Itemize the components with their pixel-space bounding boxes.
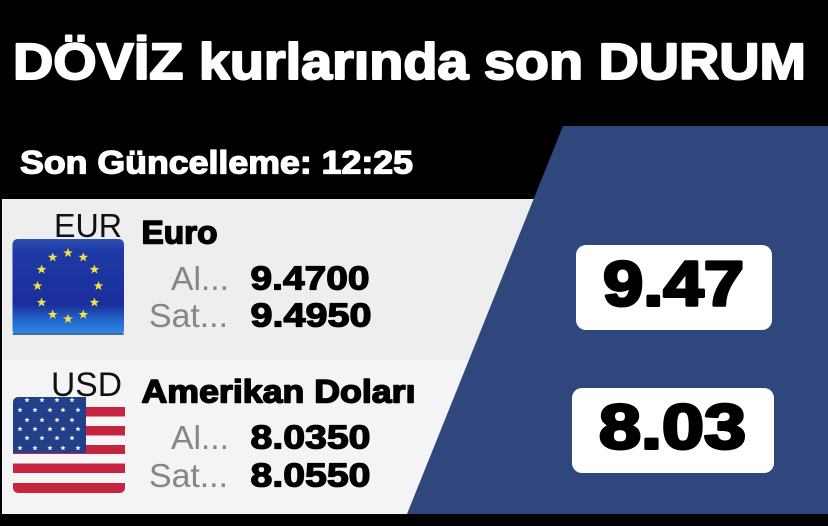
row: Euro xyxy=(12,208,372,335)
icon: US flag xyxy=(13,397,125,493)
buy value: 8.0350 xyxy=(250,418,370,456)
row: US Dollar xyxy=(13,366,416,495)
buy label: Al... xyxy=(171,420,229,457)
sell label: Sat... xyxy=(149,458,228,495)
callout: euro rate xyxy=(576,245,772,330)
callout: dollar rate: 8.03 xyxy=(599,392,746,462)
panel: blue rates background xyxy=(407,126,828,514)
panel: currency list xyxy=(2,199,562,514)
last update label: Son Güncelleme: 12:25 xyxy=(20,144,413,180)
sell value: 8.0550 xyxy=(250,456,370,494)
title: DÖVİZ kurlarında son DURUM xyxy=(13,33,806,90)
icon: EU flag xyxy=(12,239,124,335)
callout: dollar rate xyxy=(572,388,774,473)
buy label: Al... xyxy=(171,261,229,298)
sell value: 9.4950 xyxy=(250,296,372,334)
buy value: 9.4700 xyxy=(250,260,370,296)
currency name Euro: Euro xyxy=(142,214,218,250)
callout: euro rate: 9.47 xyxy=(603,250,744,320)
sell label: Sat... xyxy=(149,298,228,335)
currency code EUR: EUR xyxy=(54,208,122,245)
currency name Amerikan Doları: Amerikan Doları xyxy=(142,374,416,410)
currency code USD: USD xyxy=(51,366,122,404)
